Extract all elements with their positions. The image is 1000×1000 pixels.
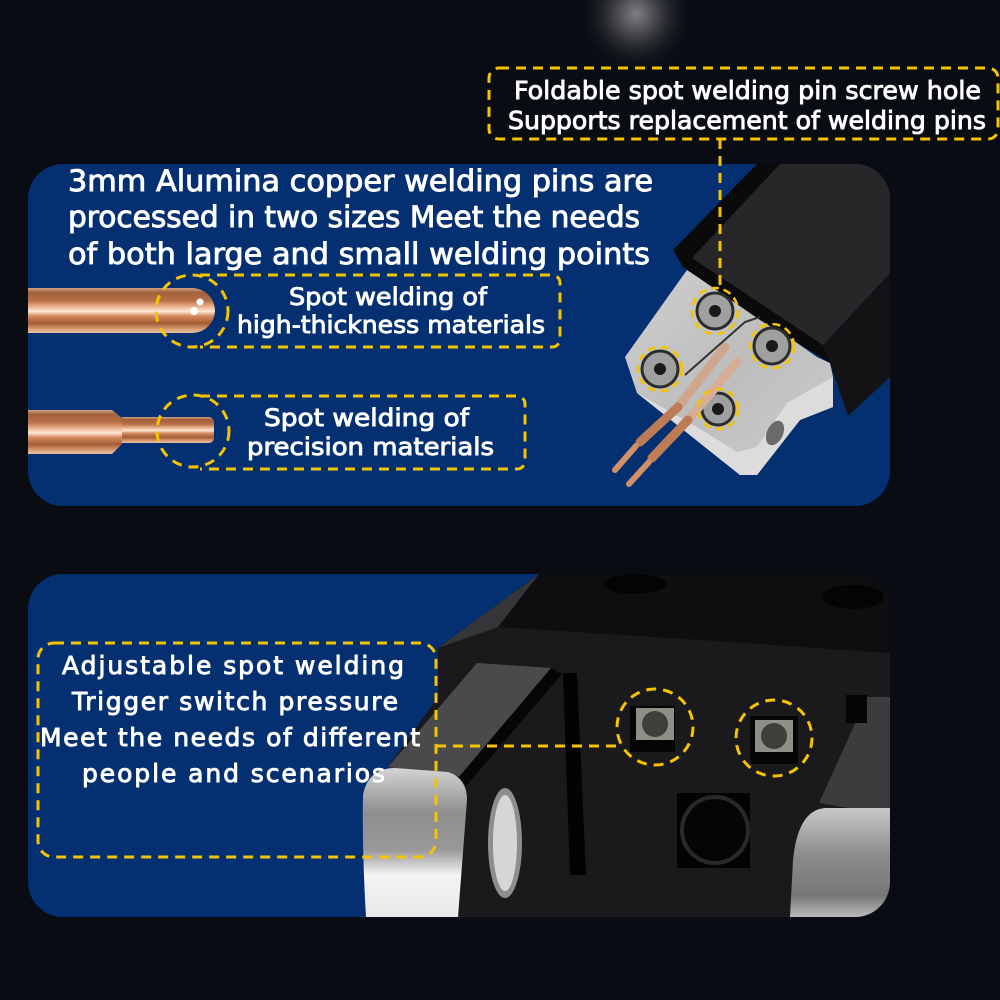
right metal block [790,808,890,917]
heading text: 3mm Alumina copper welding pins are [68,164,653,198]
large pin callout: high-thickness materials [237,311,545,339]
heading text: of both large and small welding points [68,237,650,271]
housing top face [692,164,890,345]
panel: alumina copper welding pins [28,164,890,506]
spotlight [576,0,696,76]
left grey arm [388,663,551,777]
block side edge [637,377,833,475]
fine pin callout: Spot welding of [264,404,470,432]
panel background [28,574,890,917]
left metal block [363,768,467,917]
left bevel [438,574,539,648]
recess [563,673,586,875]
trigger callout: people and scenarios [82,759,385,788]
housing side [823,273,890,416]
oval bolt [488,788,522,898]
panel background [28,164,890,506]
housing body [388,574,890,917]
photo: trigger housing [363,574,890,917]
trigger callout: Trigger switch pressure [71,687,398,716]
fine pin callout: precision materials [247,433,494,461]
callout: screw hole: Supports replacement of welding pins [508,106,986,135]
side hole [766,420,784,446]
large pin callout: Spot welding of [289,283,488,311]
trigger callout: Meet the needs of different [40,723,420,752]
metal block [625,270,833,475]
housing upper bevel [438,574,890,653]
black housing edge [673,164,830,363]
heading text: processed in two sizes Meet the needs [68,200,640,234]
photo: welding head [615,164,890,484]
right dark notch [846,695,867,723]
screw highlight circles [638,288,794,429]
panel: adjustable trigger [28,574,890,917]
fine pin callout [157,395,525,469]
small welding pins [615,347,737,484]
fine copper pin [28,410,214,454]
right grey arm [819,697,890,815]
heading text [68,164,653,271]
arm shadow [458,668,562,786]
callout: screw hole: Foldable spot welding pin screw hole [514,76,981,105]
trigger screw left [630,706,675,752]
callout: screw hole [489,68,998,288]
trigger screw right [750,716,798,764]
jack [677,793,750,868]
block slot [685,317,760,375]
screws [642,293,790,425]
top screws [604,574,884,609]
trigger callout: Adjustable spot welding [62,651,404,680]
large pin callout [156,275,560,347]
large copper pin [28,288,215,333]
trigger callout [38,643,812,857]
